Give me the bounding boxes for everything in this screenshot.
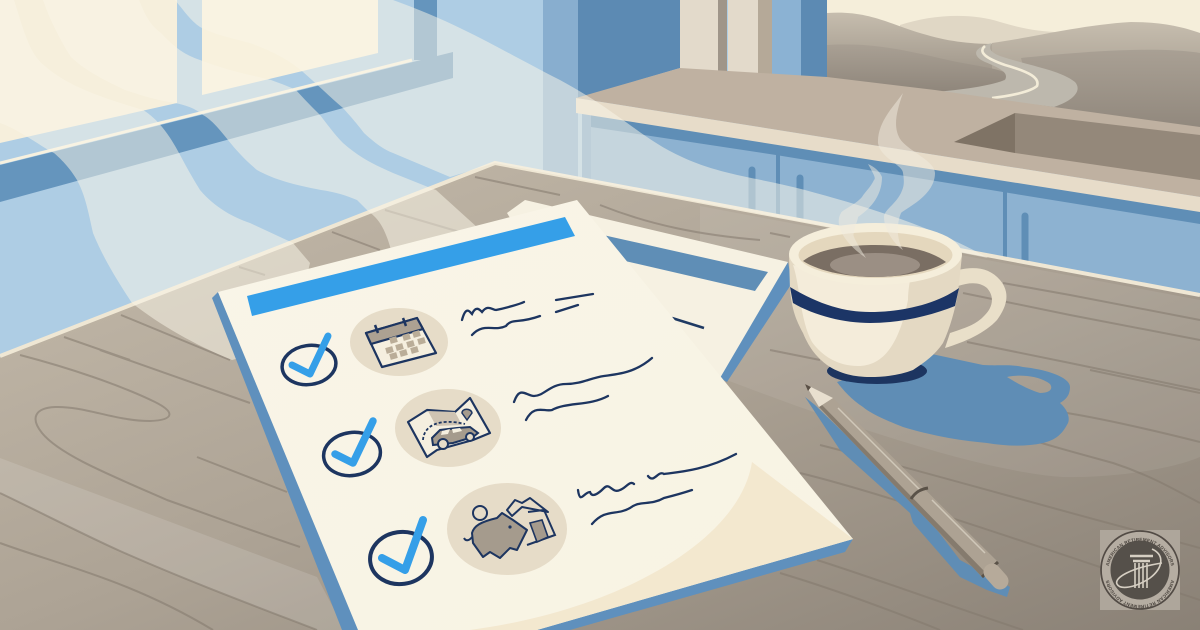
window with sill xyxy=(0,0,453,202)
steam xyxy=(839,93,935,258)
coffee cup shadow xyxy=(837,353,1070,446)
pen body xyxy=(819,398,998,577)
checkbox 1 xyxy=(280,336,338,388)
logo ring text: AMERICAN RETIREMENT ADVISORS xyxy=(1106,538,1174,566)
coffee cup xyxy=(789,223,1006,384)
front checklist paper xyxy=(218,200,853,630)
cup body xyxy=(789,255,962,377)
back paper xyxy=(507,200,792,382)
cabinets xyxy=(582,112,1200,300)
row 1: checklist item xyxy=(280,294,593,388)
landscape through rear window xyxy=(827,0,1200,135)
cup band xyxy=(790,287,959,323)
handwriting line 3 xyxy=(578,454,736,524)
logo ring text xyxy=(1106,538,1174,608)
logo column xyxy=(1117,549,1162,588)
coffee xyxy=(803,245,946,277)
front paper bottom edge xyxy=(530,539,853,630)
logo ring text: AMERICAN RETIREMENT ADVISORS xyxy=(1106,580,1174,608)
cup highlight xyxy=(793,265,912,366)
checkbox 2 xyxy=(321,421,383,479)
pen collar and cap xyxy=(911,488,998,577)
handwriting line 1 xyxy=(462,294,593,335)
table top xyxy=(0,163,1200,630)
pen xyxy=(805,384,1010,597)
haze waves of sunlight xyxy=(0,0,988,360)
row 2: checklist item xyxy=(321,358,652,479)
checkbox 3 xyxy=(367,520,435,588)
handwriting line 2 xyxy=(514,358,652,420)
row 3: checklist item xyxy=(367,454,736,588)
header bar xyxy=(247,217,575,316)
icon: map and car xyxy=(395,389,501,467)
books xyxy=(680,0,827,89)
icon: piggy bank and house xyxy=(447,483,567,575)
icon: calendar xyxy=(350,308,448,376)
logo badge xyxy=(1100,530,1180,610)
cup handle xyxy=(945,268,1006,348)
wall pillar xyxy=(543,0,680,185)
pen shadow xyxy=(805,397,1010,597)
counter with sink xyxy=(576,68,1200,212)
front paper left edge xyxy=(212,292,360,630)
cup base xyxy=(827,358,927,384)
cup rim xyxy=(789,223,962,285)
pen tip xyxy=(805,384,833,407)
back paper header xyxy=(603,235,768,291)
